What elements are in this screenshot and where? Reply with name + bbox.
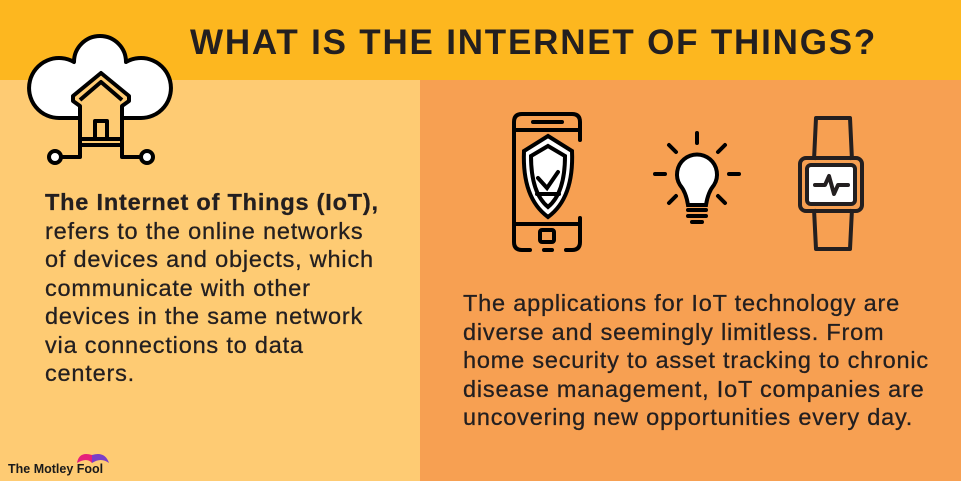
text block: right description: disease management, IoT companies are xyxy=(463,376,925,402)
text block: left description: devices in the same network xyxy=(45,303,363,329)
title: WHAT IS THE INTERNET OF THINGS? xyxy=(190,23,877,62)
icon: cloud home xyxy=(27,34,173,165)
icon: light bulb xyxy=(653,131,741,224)
text block: right description: The applications for IoT technology are xyxy=(463,290,900,316)
text block: left description: centers. xyxy=(45,360,135,386)
text block: left description xyxy=(44,189,379,386)
text block: right description xyxy=(463,290,929,430)
text block: right description: home security to asset tracking to chronic xyxy=(463,347,929,373)
text block: right description: diverse and seemingly limitless. From xyxy=(463,318,884,344)
text block: left description: via connections to data xyxy=(45,332,304,358)
text block: left description: refers to the online networks xyxy=(45,218,363,244)
header band xyxy=(0,0,961,80)
text block: right description: uncovering new opportunities every day. xyxy=(463,404,913,430)
icon: phone shield xyxy=(512,112,582,252)
panel: right xyxy=(420,80,961,481)
text block: left description: The Internet of Things (IoT), xyxy=(45,189,379,215)
text block: left description: of devices and objects, which xyxy=(45,246,374,272)
text block: left description: communicate with other xyxy=(45,274,311,300)
logo: The Motley Fool xyxy=(8,454,109,476)
logo: The Motley Fool: The Motley Fool xyxy=(8,462,103,476)
icon: smartwatch xyxy=(798,116,864,251)
